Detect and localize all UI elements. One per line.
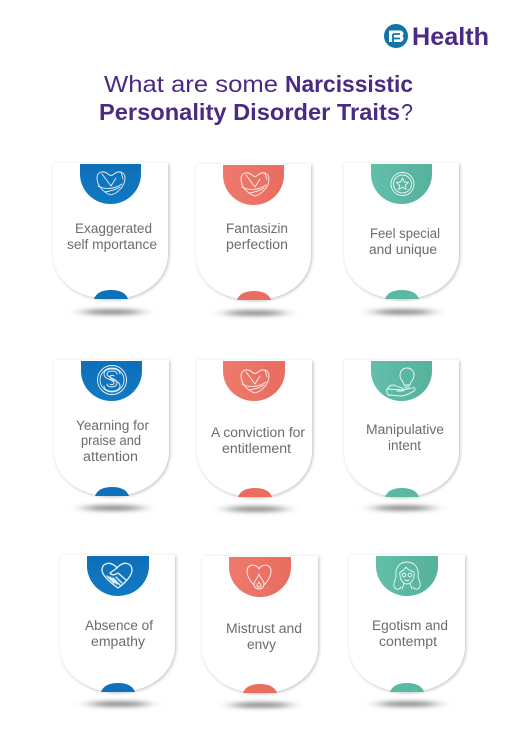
title: Narcissistic [285, 71, 413, 97]
text [372, 618, 448, 649]
text: Absence of [85, 618, 153, 633]
text [226, 621, 302, 652]
text: empathy [91, 634, 145, 649]
icon: heart with flame [247, 565, 271, 589]
text [85, 618, 153, 649]
text: Yearning for [76, 418, 150, 433]
text: entitlement [222, 441, 291, 456]
text: attention [83, 449, 138, 464]
text: envy [247, 637, 276, 652]
text: perfection [226, 237, 288, 252]
icon: hugging heart [97, 172, 125, 195]
text: Egotism and [372, 618, 448, 633]
title: Personality Disorder Traits [99, 99, 400, 125]
text: Feel special [370, 226, 440, 241]
card: Mistrust and envy [202, 556, 318, 708]
card: Feel special and unique [344, 163, 459, 315]
text [366, 422, 444, 453]
card: Fantasizin perfection [196, 164, 311, 316]
icon: spiral circle [98, 366, 126, 394]
icon: hugging heart [241, 173, 269, 196]
icon: handshake heart [102, 563, 132, 588]
card: A conviction for entitlement [197, 360, 312, 512]
text: Manipulative [366, 422, 444, 437]
icon: star badge [391, 172, 414, 196]
text: A conviction for [211, 425, 306, 440]
text [67, 221, 157, 252]
card: Yearning for praise and attention [54, 360, 169, 511]
text: self mportance [67, 237, 157, 252]
icon: woman face [394, 562, 420, 589]
card: Egotism and contempt [349, 555, 465, 707]
text: praise and [81, 433, 141, 448]
text: intent [388, 438, 421, 453]
card: Manipulative intent [344, 360, 459, 511]
text: contempt [379, 634, 437, 649]
logo: BHealth [384, 23, 489, 51]
logo mark [384, 24, 408, 48]
logo wordmark: Health [412, 23, 489, 51]
text [226, 221, 288, 252]
text: Exaggerated [75, 221, 152, 236]
text: Mistrust and [226, 621, 302, 636]
text: and unique [369, 242, 437, 257]
text: Fantasizin [226, 221, 288, 236]
title [99, 71, 413, 125]
text [369, 226, 440, 257]
card: Exaggerated self importance [53, 163, 168, 315]
title: What are some [104, 71, 278, 97]
title: ? [401, 99, 413, 125]
text [76, 418, 150, 464]
icon: hugging heart [241, 370, 269, 393]
icon: hand holding bulb [387, 368, 415, 396]
card: Absence of empathy [60, 555, 175, 707]
text [211, 425, 306, 456]
